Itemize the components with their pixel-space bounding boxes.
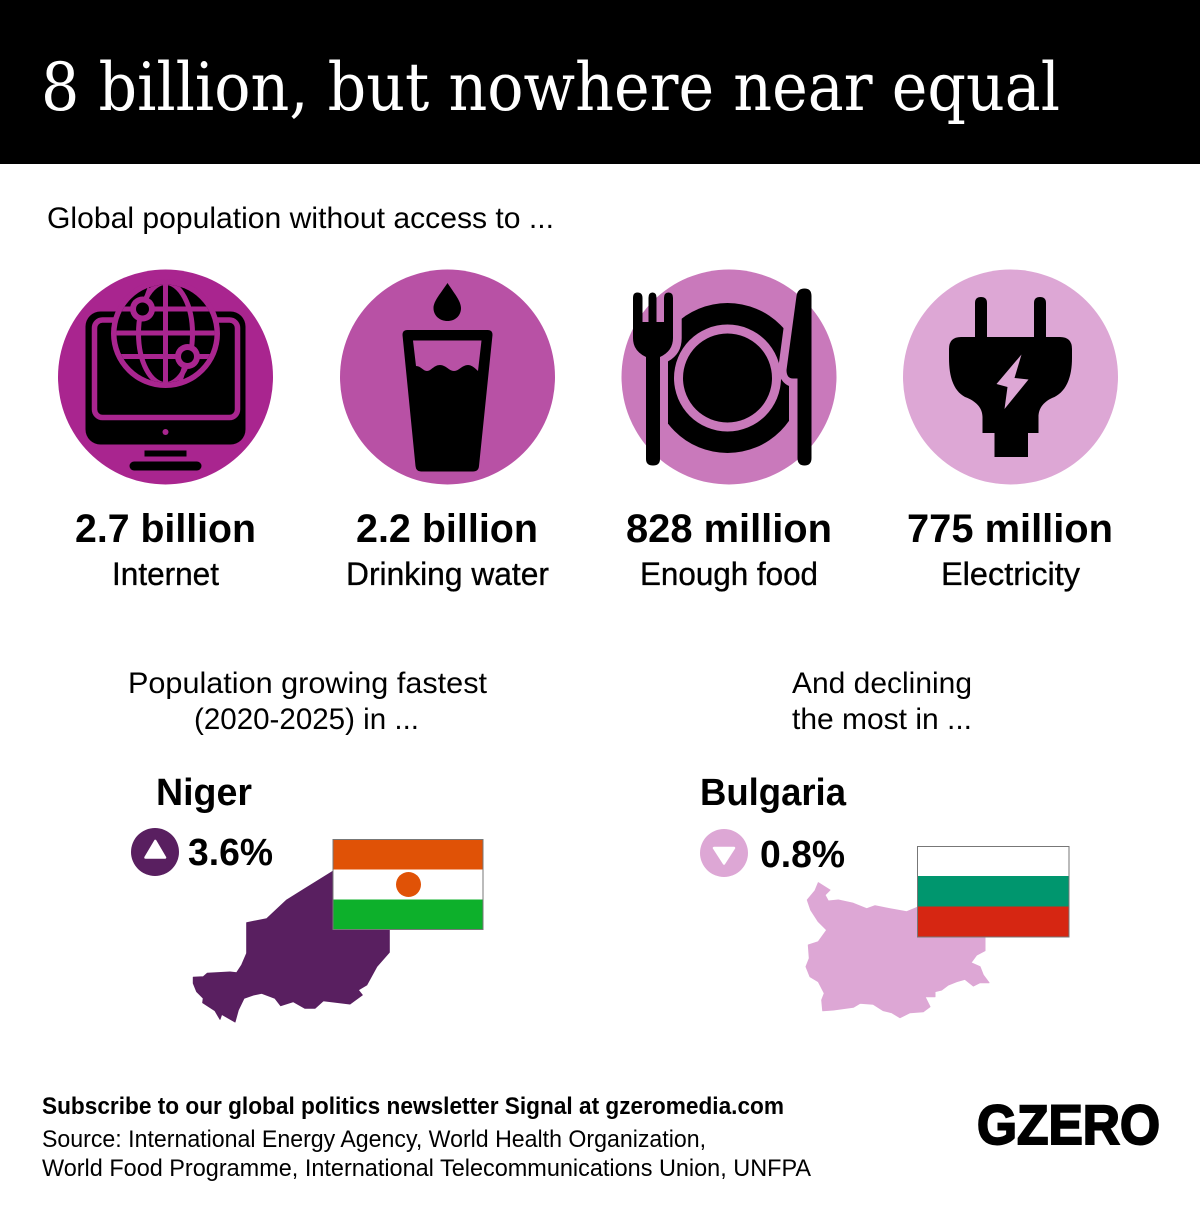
heading: declining the most: And declining [792, 667, 972, 700]
footer: source [42, 1126, 811, 1182]
country name: Bulgaria: Bulgaria [700, 772, 847, 814]
icon: electric plug [903, 270, 1118, 484]
label: enough food: Enough food [640, 556, 818, 592]
footer: source: World Food Programme, International Telecommunications Union, UNFPA [42, 1155, 811, 1182]
panel: Niger [131, 772, 483, 1022]
panel: electricity [903, 270, 1118, 592]
label: electricity: Electricity [941, 556, 1080, 592]
heading: population growing fastest: (2020-2025) in ... [194, 703, 419, 736]
panel: drinking water [340, 270, 555, 592]
stat: Niger growth: 3.6% [188, 832, 273, 874]
heading: population growing fastest: Population growing fastest [128, 667, 488, 700]
country name: Niger: Niger [156, 772, 252, 814]
stat: enough food: 828 million [626, 507, 832, 551]
heading: population growing fastest [128, 667, 488, 736]
icon: up arrow badge [131, 828, 179, 876]
stat: Bulgaria decline: 0.8% [760, 834, 845, 876]
icon: glass of water [340, 270, 555, 484]
footer: source: Source: International Energy Agency, World Health Organization, [42, 1126, 706, 1153]
stat: internet: 2.7 billion [75, 507, 256, 551]
label: drinking water: Drinking water [346, 556, 549, 592]
logo: GZERO: GZERO [977, 1093, 1160, 1156]
title banner [0, 0, 1200, 164]
map: Niger [193, 871, 389, 1022]
flag: Niger [333, 840, 483, 930]
panel: Bulgaria [700, 772, 1069, 1018]
icon: plate with fork and knife [622, 270, 836, 484]
label: internet: Internet [112, 556, 219, 592]
heading: declining the most [792, 667, 972, 736]
panel: internet [58, 270, 273, 592]
icon: down arrow badge [700, 829, 748, 877]
section heading: global access: Global population without access to ... [47, 202, 554, 235]
icon: computer with globe [58, 270, 273, 484]
stat: drinking water: 2.2 billion [356, 507, 538, 551]
panel: enough food [622, 270, 836, 592]
title banner: 8 billion, but nowhere near equal [41, 49, 1060, 126]
stat: electricity: 775 million [907, 507, 1113, 551]
flag: Bulgaria [918, 846, 1069, 937]
heading: declining the most: the most in ... [792, 703, 972, 736]
map: Bulgaria [806, 883, 989, 1018]
footer: subscribe line: Subscribe to our global politics newsletter Signal at gzeromedia.com [42, 1093, 784, 1120]
